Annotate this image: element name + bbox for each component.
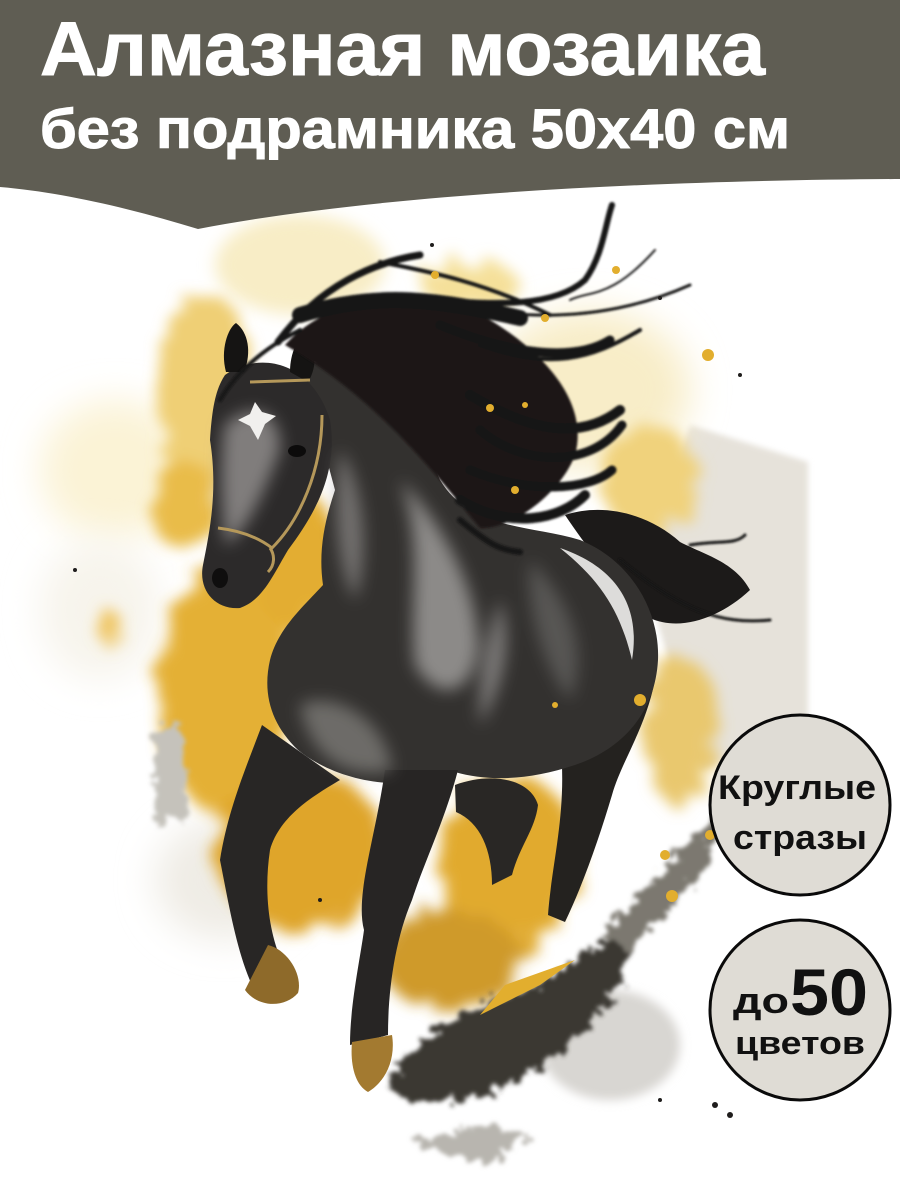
horse: croup highlight <box>560 548 634 660</box>
title: Алмазная мозаика <box>40 7 766 92</box>
horse: mane <box>220 205 770 621</box>
badge: up to 50 colours: до <box>733 980 789 1021</box>
background: dark ink smudges <box>155 720 722 1165</box>
badge: up to 50 colours: цветов <box>735 1025 865 1061</box>
ink specks <box>73 243 742 1118</box>
horse: raised front leg <box>220 725 340 985</box>
illustration: black horse <box>202 205 770 1092</box>
background: gold leaf splashes <box>100 261 718 1010</box>
horse: far hind leg <box>455 778 538 885</box>
horse: nostril and mouth <box>212 568 228 588</box>
horse: body highlights <box>221 411 578 772</box>
horse: tail <box>565 510 750 623</box>
horse: near hind leg <box>548 680 655 922</box>
horse: bridle <box>218 380 322 572</box>
header banner <box>0 0 900 229</box>
horse: front hoof <box>245 945 299 1004</box>
gold flecks on mane and body <box>431 266 715 1015</box>
background: watercolor washes <box>40 215 808 1100</box>
badge: round rhinestones: стразы <box>733 819 867 857</box>
badge: round rhinestones <box>710 715 890 895</box>
badge: up to 50 colours <box>710 920 890 1100</box>
horse: body and neck <box>267 360 658 783</box>
horse: rear hoof <box>352 1035 393 1092</box>
horse: right ear <box>290 334 315 382</box>
badge: round rhinestones: Круглые <box>718 769 876 807</box>
horse: left ear <box>224 323 248 372</box>
subtitle: без подрамника 50х40 см <box>40 97 790 160</box>
horse: head <box>202 363 332 608</box>
horse: eye <box>288 445 306 457</box>
badge: up to 50 colours: 50 <box>790 955 868 1029</box>
horse: forehead star <box>238 402 276 440</box>
horse: supporting front leg <box>350 770 458 1045</box>
